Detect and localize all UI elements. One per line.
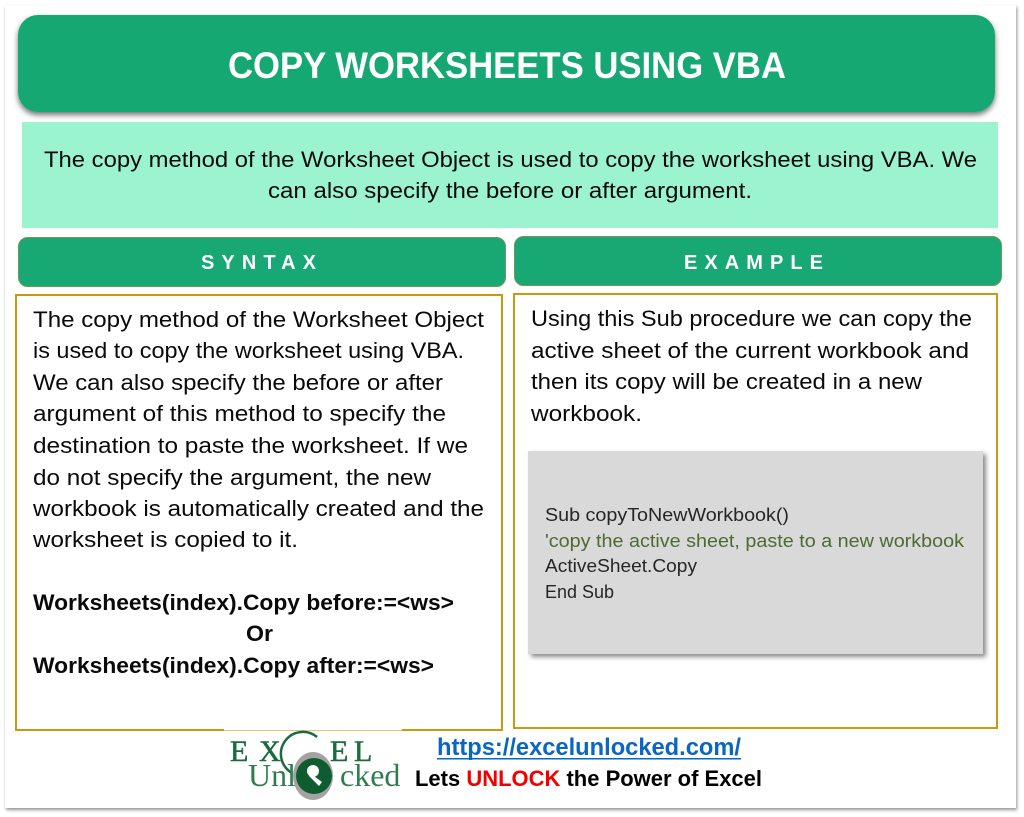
example header: EXAMPLE	[684, 252, 823, 274]
example header	[514, 236, 1002, 286]
syntax description	[32, 307, 485, 552]
syntax description: We can also specify the before or after	[33, 370, 444, 395]
code box: End Sub	[545, 582, 614, 602]
syntax code lines	[33, 590, 454, 678]
tagline: Lets UNLOCK the Power of Excel	[415, 766, 762, 791]
syntax description: worksheet is copied to it.	[32, 527, 298, 552]
panel: example	[514, 294, 997, 728]
code box: Sub copyToNewWorkbook()	[545, 505, 789, 525]
intro panel: The copy method of the Worksheet Object is used to copy the worksheet using VBA. We	[44, 147, 977, 172]
logo: Excel Unlocked: X	[259, 735, 281, 768]
logo: Excel Unlocked: cked	[340, 757, 400, 793]
syntax description: The copy method of the Worksheet Object	[33, 307, 485, 332]
example description: workbook.	[530, 401, 642, 426]
syntax description: is used to copy the worksheet using VBA.	[33, 338, 464, 363]
code box	[528, 451, 983, 654]
code box: ActiveSheet.Copy	[545, 556, 697, 576]
syntax code lines: Worksheets(index).Copy before:=<ws>	[33, 590, 454, 615]
syntax description: argument of this method to specify the	[33, 401, 446, 426]
syntax description: destination to paste the worksheet. If we	[33, 433, 468, 458]
title banner: COPY WORKSHEETS USING VBA	[228, 45, 786, 86]
syntax description: do not specify the argument, the new	[33, 465, 432, 490]
logo: Excel Unlocked: E	[330, 735, 348, 768]
intro panel	[22, 122, 998, 228]
intro panel: can also specify the before or after argument.	[268, 178, 752, 203]
logo: Excel Unlocked: E	[230, 735, 248, 768]
website link: https://excelunlocked.com/	[437, 734, 741, 761]
example description: Using this Sub procedure we can copy the	[531, 306, 972, 331]
logo: Excel Unlocked	[224, 729, 402, 800]
title banner	[18, 15, 995, 112]
syntax header: SYNTAX	[201, 252, 317, 274]
syntax code lines: Worksheets(index).Copy after:=<ws>	[33, 653, 434, 678]
panel: syntax	[16, 295, 502, 730]
syntax header	[18, 238, 506, 286]
logo: Excel Unlocked: L	[354, 735, 372, 768]
code box: 'copy the active sheet, paste to a new workbook	[545, 531, 965, 551]
example description	[530, 306, 972, 426]
syntax code lines: Or	[246, 621, 273, 646]
example description: then its copy will be created in a new	[531, 369, 923, 394]
example description: active sheet of the current workbook and	[531, 338, 969, 363]
logo: Excel Unlocked: Unl	[248, 757, 296, 793]
syntax description: workbook is automatically created and the	[32, 496, 484, 521]
